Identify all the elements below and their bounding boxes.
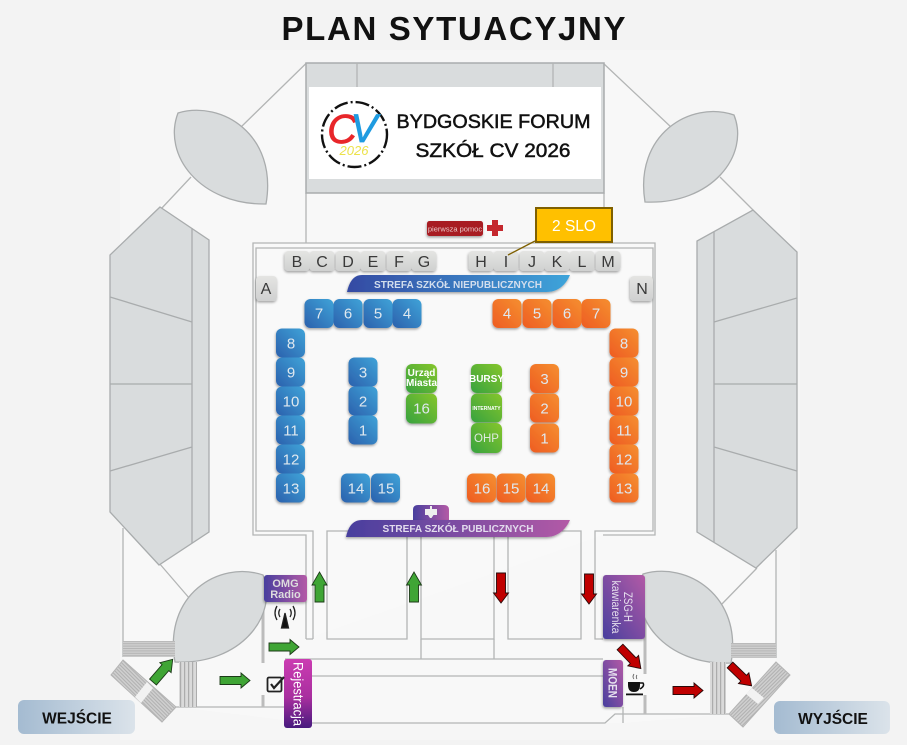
label: OMG Radio: Radio [270, 589, 301, 601]
blue stands: 4 [403, 306, 411, 322]
orange stands [467, 299, 638, 502]
orange stands: 16 [474, 480, 490, 498]
arrow: red diagonal 1 [615, 642, 646, 674]
title: PLAN SYTUACYJNY [282, 10, 626, 47]
button: WEJŚCIE [18, 700, 135, 734]
leaf: top right [644, 112, 738, 202]
blue stands: 14 [348, 480, 364, 498]
blue stands: 8 [287, 336, 295, 352]
green stands: OHP [474, 433, 499, 445]
icon: red cross [487, 220, 503, 236]
button: WEJŚCIE: WEJŚCIE [42, 710, 112, 728]
blue stands: 12 [283, 452, 299, 468]
orange stands: 8 [620, 336, 628, 352]
orange stands: 13 [616, 480, 632, 498]
arrow: red down 2 [582, 574, 596, 604]
logo: CV 2026 badge: 2026 [339, 143, 369, 158]
orange stands: 15 [503, 480, 519, 498]
leaf: exit lobby [639, 571, 733, 663]
icon: coffee cup [626, 674, 644, 695]
letter stands: F [394, 254, 404, 271]
arrow: red right [673, 683, 703, 698]
orange stands: 14 [533, 480, 549, 498]
leaf: top left [174, 110, 268, 204]
arrow: red diagonal 2 [725, 660, 757, 691]
logo text: BYDGOSKIE FORUM [396, 112, 590, 133]
letter stands: B [292, 254, 302, 271]
wing: left stand [110, 207, 209, 565]
blue stands: 3 [359, 364, 367, 382]
entrance door and bands [111, 641, 197, 722]
orange stands: 1 [540, 430, 549, 448]
blue stands: 1 [359, 422, 367, 440]
blue stands: 6 [344, 306, 352, 322]
orange stands: 10 [616, 394, 632, 410]
orange stands: 3 [540, 371, 549, 388]
arrow: red down 1 [494, 573, 508, 603]
blue stands: 2 [359, 394, 367, 410]
letter stands: I [504, 254, 508, 271]
green stands [406, 364, 504, 453]
logo: CV 2026 badge: C [327, 106, 357, 152]
letter stands: J [528, 254, 536, 271]
banner: non-public schools zone: STREFA SZKÓŁ NIEPUBLICZNYCH [374, 278, 542, 291]
orange stands: 5 [533, 306, 541, 322]
blue stands: 11 [283, 422, 299, 440]
letter stands: L [578, 254, 587, 271]
orange stands: 9 [620, 364, 628, 382]
wing: right stand [697, 210, 797, 568]
exit door and bands [710, 643, 790, 727]
orange stands: 12 [616, 452, 632, 468]
banner: public schools zone [346, 505, 570, 537]
first aid label [427, 220, 503, 236]
button: WYJŚCIE [774, 701, 890, 734]
label: ZSG-H kawiarenka: kawiarenka [609, 580, 621, 634]
banner: non-public schools zone [347, 275, 570, 292]
green stands: Urząd [408, 368, 435, 379]
letter stands: E [368, 254, 378, 271]
letter stands: C [316, 254, 328, 271]
label: OMG Radio: OMG [272, 578, 299, 590]
icon: radio mast [275, 606, 295, 628]
blue stands: 10 [283, 394, 299, 410]
label: OMG Radio [264, 575, 307, 602]
logo: CV 2026 badge: V [351, 107, 381, 151]
green stands: Miasta [406, 378, 437, 389]
arrow: green up 1 [312, 572, 327, 602]
arrow: green diagonal [147, 654, 178, 687]
green stands: INTERNATY [472, 406, 501, 412]
letter stands: K [552, 254, 563, 271]
label: MOEN [603, 660, 623, 707]
label: Rejestracja: Rejestracja [290, 662, 306, 726]
logo: CV 2026 badge [322, 102, 387, 167]
blue stands: 5 [374, 306, 382, 322]
orange stands: 4 [503, 306, 511, 322]
orange stands: 7 [592, 306, 600, 322]
label: Rejestracja [284, 659, 312, 728]
callout: 2 SLO [508, 208, 612, 255]
letter stands: M [601, 254, 615, 271]
main hall top band [306, 63, 604, 193]
letter stands: H [475, 254, 487, 271]
blue stands: 9 [287, 364, 295, 382]
arrow: green right at entrance [220, 673, 250, 688]
icon: stage marker [425, 506, 437, 518]
button: WYJŚCIE: WYJŚCIE [798, 710, 868, 728]
letter stands: G [418, 254, 430, 271]
orange stands: 6 [563, 306, 571, 322]
letter stands: A [261, 281, 272, 298]
label: ZSG-H kawiarenka [603, 575, 645, 639]
logo text line 2: SZKÓŁ CV 2026 [416, 140, 570, 162]
zone walls [253, 243, 655, 639]
blue stands: 7 [315, 306, 323, 322]
blue stands [276, 299, 422, 502]
label: ZSG-H kawiarenka: ZSG-H [621, 592, 633, 622]
logo panel [309, 87, 601, 179]
green stands: BURSY [469, 374, 504, 385]
floor plan outline [110, 50, 800, 740]
leaf: entrance lobby [173, 572, 267, 662]
letter stands [256, 251, 653, 301]
icon: check box [268, 677, 284, 692]
letter stands: D [342, 254, 354, 271]
letter stands: N [636, 281, 648, 298]
label: MOEN: MOEN [606, 668, 620, 698]
banner: public schools zone: STREFA SZKÓŁ PUBLICZNYCH [382, 522, 534, 535]
orange stands: 11 [616, 422, 632, 440]
orange stands: 2 [540, 400, 549, 418]
arrow: green up 2 [406, 572, 422, 602]
blue stands: 13 [283, 480, 299, 498]
blue stands: 15 [378, 480, 394, 498]
first aid label: pierwsza pomoc [428, 224, 482, 234]
green stands: 16 [413, 400, 430, 418]
callout: 2 SLO: 2 SLO [552, 218, 596, 235]
arrow: green right in lobby [269, 640, 299, 654]
